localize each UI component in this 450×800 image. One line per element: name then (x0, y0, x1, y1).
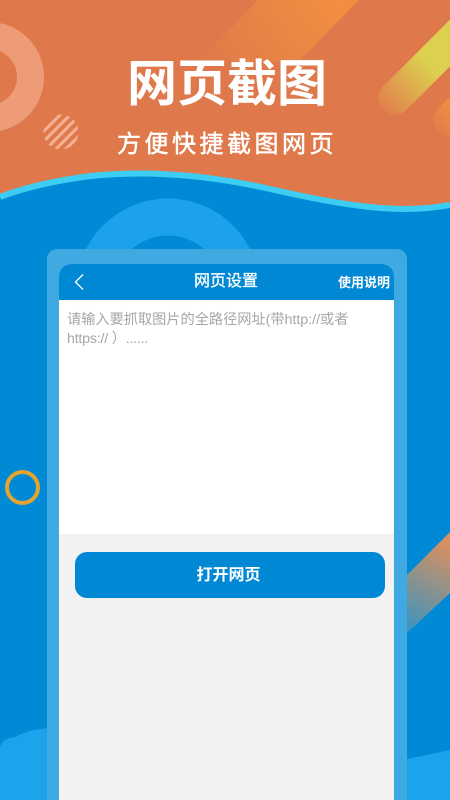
cyan wave stripe (0, 174, 450, 209)
right diagonal band (407, 532, 450, 633)
header title: 网页设置 (194, 273, 258, 290)
bottom right cloud (400, 750, 450, 800)
translucent ring (0, 36, 30, 118)
open page button: 打开网页 (196, 567, 260, 584)
phone card (47, 249, 407, 800)
icon: back arrow (74, 274, 84, 290)
orange diagonal band (198, 0, 359, 62)
placeholder text: 请输入要抓取图片的全路径网址(带http://或者 (67, 312, 348, 328)
open page button (75, 552, 385, 598)
url input area (59, 300, 394, 534)
bottom left cloud (0, 728, 50, 800)
striped circle (44, 114, 78, 150)
placeholder text (67, 312, 348, 347)
gold ring (7, 472, 38, 503)
app header bar (59, 264, 394, 300)
help link: 使用说明 (338, 275, 390, 290)
orange header background (0, 0, 450, 210)
blue ring (95, 217, 241, 363)
app screen (59, 264, 394, 800)
placeholder text: https:// ）...... (67, 331, 148, 347)
yellow diagonal band (395, 13, 450, 98)
title: 网页截图 (127, 56, 327, 112)
subtitle: 方便快捷截图网页 (117, 131, 337, 158)
